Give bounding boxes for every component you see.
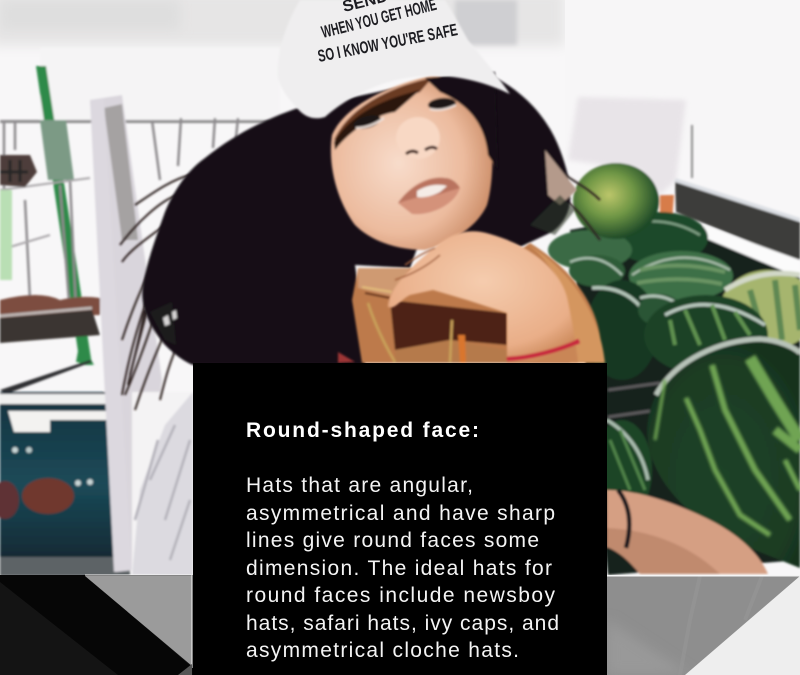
body text: Hats that are angular, bbox=[246, 474, 473, 497]
hair wisps bbox=[120, 175, 600, 410]
body text: hats, safari hats, ivy caps, and bbox=[246, 612, 559, 635]
big melon bbox=[647, 337, 800, 568]
right fringe bbox=[425, 72, 498, 170]
hand under chin bbox=[388, 231, 579, 362]
melon center bbox=[644, 295, 768, 375]
body text: asymmetrical and have sharp bbox=[246, 502, 555, 525]
white shirt sleeve bbox=[132, 392, 193, 576]
body text bbox=[246, 474, 559, 662]
bottom right decorative panel bbox=[607, 575, 800, 675]
bottom left decorative panel bbox=[0, 575, 193, 675]
hair bbox=[142, 70, 577, 365]
body text: lines give round faces some bbox=[246, 529, 539, 552]
red wristband bbox=[507, 341, 579, 359]
cap text: SO I KNOW YOU'RE SAFE bbox=[316, 20, 459, 66]
melon mid bbox=[629, 251, 733, 301]
melon back bbox=[612, 212, 708, 264]
white cap with slogan bbox=[278, 0, 510, 118]
left shelves, railing and crate bbox=[0, 48, 280, 576]
melon left mid bbox=[586, 280, 658, 380]
melon front small bbox=[592, 420, 652, 520]
eyes bbox=[352, 113, 382, 131]
face bbox=[331, 72, 498, 250]
melon top light bbox=[573, 163, 659, 239]
crate rail bbox=[675, 180, 800, 262]
mouth bbox=[398, 177, 460, 214]
body and neck bbox=[338, 243, 605, 363]
watermelons and crate bbox=[548, 97, 800, 575]
black text panel bbox=[193, 363, 607, 675]
sign behind melons bbox=[568, 97, 686, 195]
body text: dimension. The ideal hats for bbox=[246, 557, 552, 580]
forearm right bbox=[607, 490, 768, 574]
body text: round faces include newsboy bbox=[246, 584, 556, 607]
heading: Round-shaped face: bbox=[246, 419, 479, 442]
nose bbox=[396, 117, 440, 159]
melon right light bbox=[720, 270, 800, 350]
body text: asymmetrical cloche hats. bbox=[246, 639, 519, 662]
cap text bbox=[316, 0, 459, 66]
